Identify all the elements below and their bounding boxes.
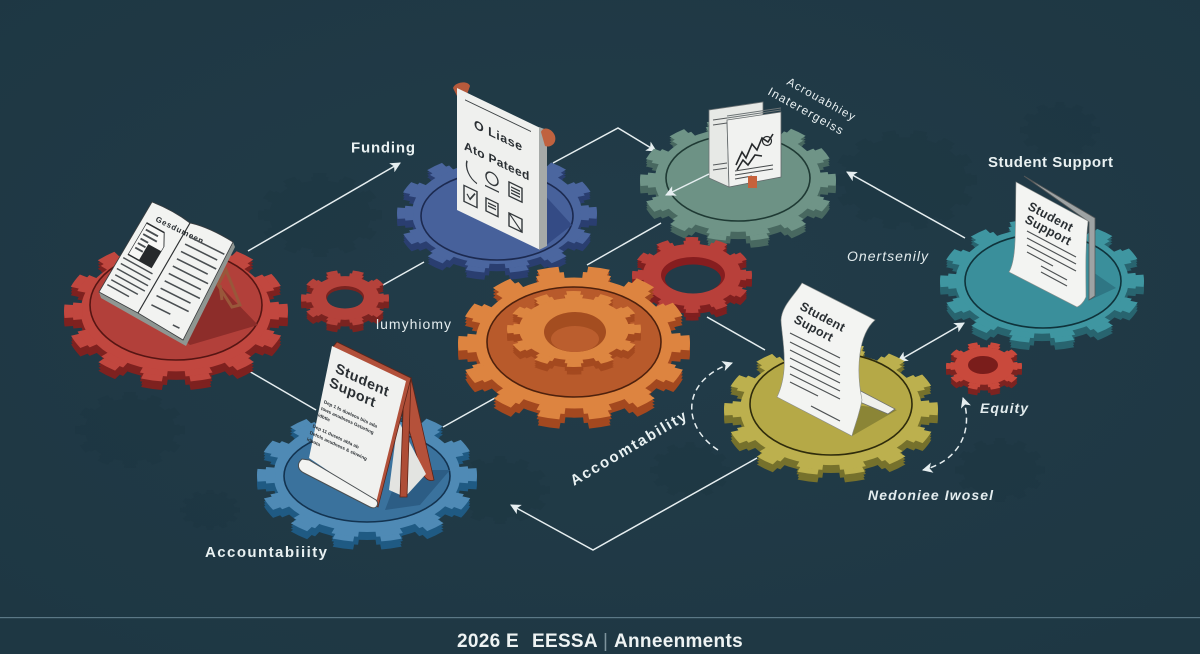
label: lumyhiomy: lumyhiomy bbox=[376, 316, 451, 332]
icon: notebook with scroll: Student bbox=[334, 361, 391, 401]
footer title: EESSA bbox=[532, 631, 598, 652]
icon: stapled document: Student bbox=[1026, 199, 1076, 235]
gear: indigo with poster bbox=[401, 82, 593, 278]
footer title: Anneenments bbox=[614, 631, 743, 652]
footer divider bbox=[0, 617, 1200, 618]
gear: red with open book bbox=[68, 202, 284, 388]
icon: notebook with scroll: Suport bbox=[327, 375, 377, 411]
connector lines and arrows bbox=[242, 128, 967, 550]
label: funding: Funding bbox=[351, 140, 415, 156]
icon: notebook with scroll bbox=[298, 342, 434, 508]
label: onertsenily: Onertsenily bbox=[847, 248, 929, 264]
icon: open book bbox=[99, 202, 240, 346]
gear: sage with reports bbox=[644, 102, 832, 246]
gear: blue with notebook bbox=[261, 342, 473, 547]
icon: notebook with scroll: Defols anudness & slowing bbox=[309, 430, 368, 462]
label: equity: Equity bbox=[980, 400, 1029, 416]
icon: notebook with scroll: tows anudness Gstarting bbox=[320, 406, 374, 435]
icon: notebook with scroll: Dep 11 dusets abla ab bbox=[312, 423, 359, 450]
icon: open book: Gesdumeen bbox=[154, 215, 205, 246]
gear: small red right bbox=[948, 343, 1020, 394]
footer title: 2026 E bbox=[457, 631, 519, 652]
icon: curled document bbox=[777, 283, 895, 436]
icon: notebook with scroll: idbtle bbox=[317, 412, 331, 423]
icon: curled document: Student bbox=[798, 299, 848, 335]
line chart scribble bbox=[736, 134, 773, 170]
gear: orange central bbox=[463, 269, 685, 426]
icon: stacked reports bbox=[709, 102, 781, 188]
icon: mail bbox=[509, 213, 522, 232]
label: accountability: Accountabiiity bbox=[205, 544, 328, 561]
faint background gears bbox=[78, 103, 1098, 529]
icon: check bbox=[464, 185, 477, 208]
icon: globe bbox=[485, 169, 499, 192]
icon: poster with roller bbox=[453, 82, 555, 250]
icon: notebook with scroll: Dep 1 fo dueleos bits ada bbox=[323, 399, 378, 429]
footer title: | bbox=[603, 631, 608, 652]
gear: small red connector bbox=[304, 272, 386, 331]
label: student support: Student Support bbox=[988, 154, 1113, 171]
icon: curled document: Suport bbox=[792, 312, 836, 345]
icon: poster with roller: O Liase bbox=[474, 117, 523, 154]
icon: poster with roller: Ato Pateed bbox=[464, 139, 530, 184]
label: nedoniee iwosel: Nedoniee Iwosel bbox=[868, 487, 994, 503]
gear: olive with scroll bbox=[728, 283, 934, 480]
icon: stapled document: Support bbox=[1023, 212, 1074, 249]
icon: stapled document bbox=[1009, 176, 1095, 307]
icon: phone bbox=[466, 161, 477, 184]
gear: medium red bbox=[635, 239, 749, 319]
label: rotated accountability: Accoomtability bbox=[567, 407, 690, 489]
icon: notebook with scroll: idbota bbox=[306, 437, 321, 448]
icon: list bbox=[509, 182, 522, 202]
gear: teal with document bbox=[944, 176, 1140, 348]
icon: screen bbox=[486, 198, 498, 217]
label: rotated acrourabhiey: Acrouabhiey bbox=[785, 76, 857, 124]
label: rotated interergeiss: Inaterergeiss bbox=[766, 84, 846, 137]
inner orange gear bbox=[510, 293, 638, 373]
